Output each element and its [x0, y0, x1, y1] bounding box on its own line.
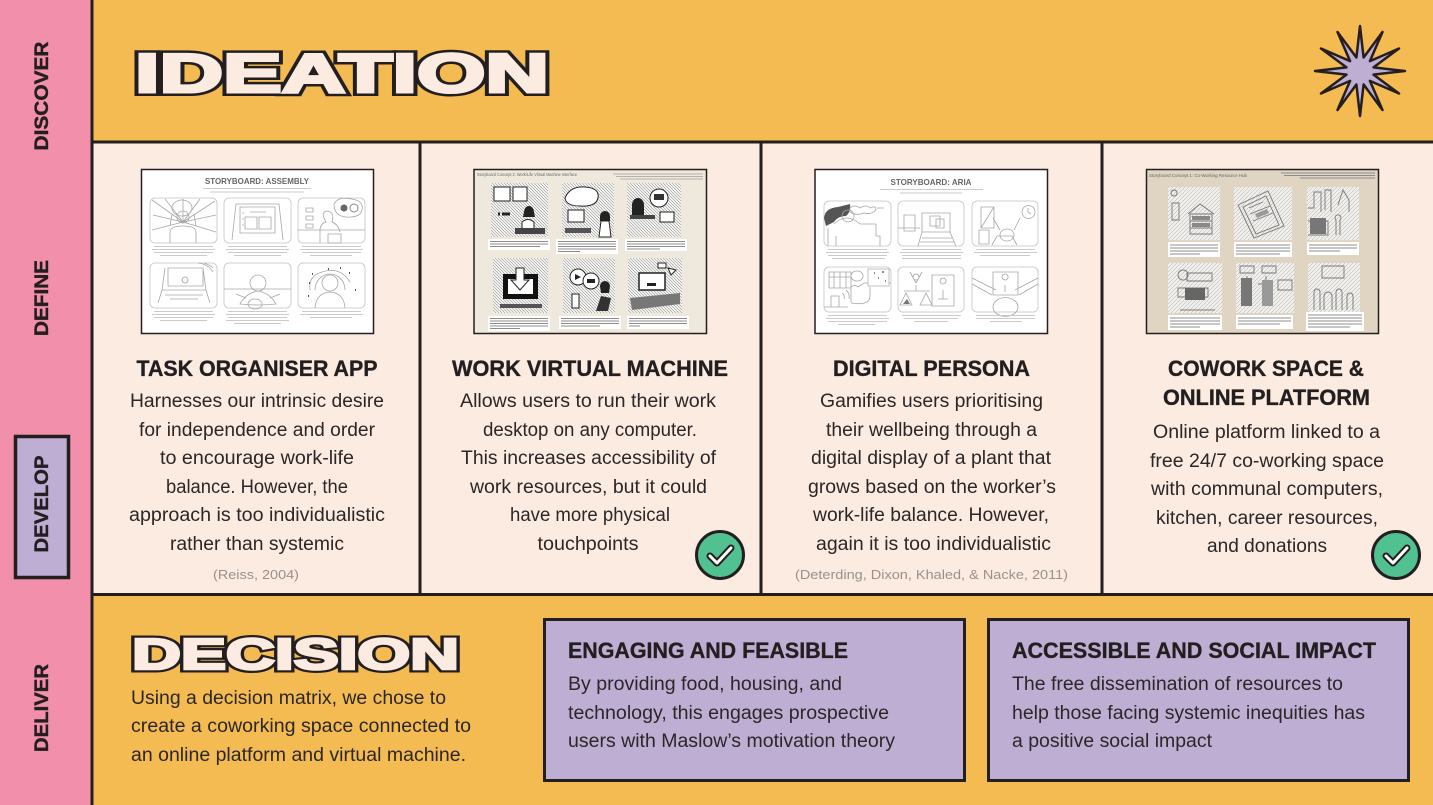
text block: cowork description: kitchen, career resources, — [1156, 508, 1378, 529]
text block: cowork description — [1150, 422, 1384, 557]
text block: decision summary: an online platform and virtual machine. — [131, 745, 466, 766]
text block: digital persona description: again it is too individualistic — [816, 534, 1051, 555]
storyboard: co-working resource hub: Storyboard Concept 1: Co-Working Resource Hub — [1149, 173, 1247, 179]
icon: check mark selected — [696, 532, 744, 578]
heading: work virtual machine: WORK VIRTUAL MACHINE — [452, 356, 728, 381]
sidebar: design process stages — [0, 0, 92, 805]
stage marker: develop (active): DEVELOP — [32, 455, 53, 552]
text block: task organiser description: Harnesses our intrinsic desire — [130, 391, 384, 412]
text block: task organiser description — [129, 391, 385, 555]
text block: digital persona description: work-life balance. However, — [812, 505, 1049, 526]
text block: work virtual machine description: desktop on any computer. — [483, 420, 697, 441]
heading: decision: DECISION — [132, 630, 459, 679]
text block: decision summary: create a coworking space connected to — [131, 716, 471, 737]
callout: accessible and social impact: ACCESSIBLE AND SOCIAL IMPACT — [1012, 638, 1377, 663]
text block: task organiser description: for independence and order — [139, 420, 376, 441]
panel: decision band — [92, 594, 1433, 805]
storyboard: aria: STORYBOARD: ARIA — [890, 177, 972, 187]
heading: digital persona: DIGITAL PERSONA — [833, 356, 1030, 381]
panel: cowork space and online platform — [1102, 142, 1433, 594]
text block: work virtual machine description: work resources, but it could — [469, 477, 707, 498]
heading: decision — [132, 630, 459, 679]
text block: work virtual machine description: touchpoints — [538, 534, 638, 555]
callout: engaging and feasible: ENGAGING AND FEASIBLE — [568, 638, 848, 663]
title: ideation — [135, 42, 549, 104]
text block: work virtual machine description: Allows users to run their work — [460, 391, 717, 412]
text block: work virtual machine description — [460, 391, 717, 555]
stage marker: develop (active) — [16, 436, 68, 578]
title: ideation: IDEATION — [135, 42, 549, 104]
callout: accessible and social impact: help those facing systemic inequities has — [1012, 703, 1365, 724]
callout: engaging and feasible: technology, this engages prospective — [568, 703, 889, 724]
stage label: define: DEFINE — [32, 260, 53, 336]
header band — [92, 0, 1433, 142]
text block: digital persona description: Gamifies users prioritising — [820, 391, 1043, 412]
callout: engaging and feasible — [544, 620, 964, 780]
storyboard: work/life virtual machine interface — [474, 170, 706, 334]
text block: cowork description: with communal computers, — [1150, 479, 1383, 500]
text block: task organiser description: to encourage work-life — [160, 448, 354, 469]
text block: task organiser description: balance. However, the — [166, 477, 348, 498]
stage label: discover: DISCOVER — [32, 41, 53, 150]
callout: accessible and social impact: a positive social impact — [1012, 731, 1213, 752]
text block: decision summary — [131, 688, 471, 766]
text block: work virtual machine description: have more physical — [510, 505, 670, 526]
callout: engaging and feasible: By providing food, housing, and — [568, 674, 842, 695]
text block: task organiser description: approach is too individualistic — [129, 505, 385, 526]
text block: cowork description: and donations — [1207, 536, 1327, 557]
citation: reiss: (Reiss, 2004) — [213, 568, 299, 582]
heading: cowork space and online platform — [1163, 356, 1370, 410]
text block: work virtual machine description: This increases accessibility of — [461, 448, 717, 469]
title: ideation: IDEATION — [135, 42, 549, 104]
callout: engaging and feasible: users with Maslow’s motivation theory — [568, 731, 896, 752]
callout: accessible and social impact — [988, 620, 1408, 780]
stage label: deliver: DELIVER — [32, 664, 53, 752]
heading: cowork space and online platform: ONLINE PLATFORM — [1163, 385, 1370, 410]
panel: digital persona — [761, 142, 1102, 594]
text block: digital persona description: their wellbeing through a — [826, 420, 1037, 441]
citation: deterding et al: (Deterding, Dixon, Khaled, & Nacke, 2011) — [795, 568, 1068, 582]
heading: cowork space and online platform: COWORK SPACE & — [1168, 356, 1364, 381]
text block: digital persona description: grows based on the worker’s — [808, 477, 1056, 498]
storyboard: co-working resource hub — [1146, 170, 1378, 334]
text block: task organiser description: rather than systemic — [170, 534, 344, 555]
text block: decision summary: Using a decision matrix, we chose to — [131, 688, 446, 709]
icon: twelve-point star — [1315, 26, 1405, 116]
storyboard: aria — [815, 170, 1048, 334]
text block: digital persona description — [808, 391, 1056, 555]
text block: digital persona description: digital display of a plant that — [811, 448, 1052, 469]
panel: task organiser app — [92, 142, 420, 594]
heading: decision: DECISION — [132, 630, 459, 679]
storyboard: assembly: STORYBOARD: ASSEMBLY — [205, 176, 309, 186]
text block: cowork description: free 24/7 co-working space — [1150, 451, 1384, 472]
storyboard: assembly — [142, 170, 374, 334]
storyboard: work/life virtual machine interface: Storyboard Concept 2: Work/Life Virtual Machine Interface — [477, 172, 577, 177]
heading: task organiser app: TASK ORGANISER APP — [136, 356, 378, 381]
panel: work virtual machine — [420, 142, 761, 594]
icon: check mark selected — [1372, 532, 1420, 578]
callout: accessible and social impact: The free dissemination of resources to — [1012, 674, 1343, 695]
text block: cowork description: Online platform linked to a — [1153, 422, 1380, 443]
